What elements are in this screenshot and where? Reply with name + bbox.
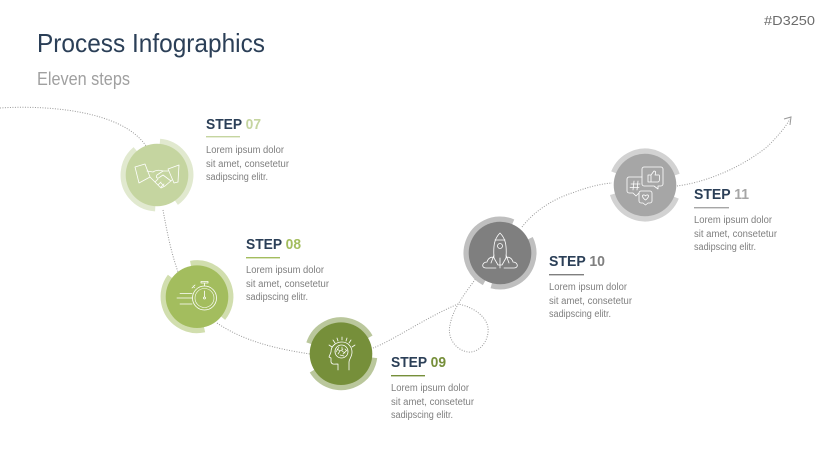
subtitle: Eleven steps [37,69,130,89]
step 08 text: STEP 08 [246,236,301,253]
step 11 badge [601,141,689,229]
step 07 text: STEP 07 [206,116,261,133]
step 10 text: Lorem ipsum dolor [549,282,628,293]
colour code label: #D3250 [764,13,815,28]
arrow head [784,117,791,125]
step 11 text [694,186,778,253]
step 10 text: sadipscing elitr. [549,309,611,320]
icon: rocket [483,233,517,268]
step 09 text: sit amet, consetetur [391,397,475,408]
step 09 text: Lorem ipsum dolor [391,383,470,394]
step 07 badge [120,138,194,212]
step 11 text: sadipscing elitr. [694,242,756,253]
step 08 badge [157,257,237,336]
step 10 text: sit amet, consetetur [549,296,633,307]
step 10 text: STEP 10 [549,253,605,270]
icon: stopwatch [177,282,216,310]
step 11 text: Lorem ipsum dolor [694,215,773,226]
step 09 badge [299,311,383,396]
step 07 text [206,116,290,183]
step 08 text: sadipscing elitr. [246,292,308,303]
dotted journey path [0,107,790,354]
icon: handshake [135,164,179,188]
step 07 text: sit amet, consetetur [206,159,290,170]
step 08 text: sit amet, consetetur [246,279,330,290]
step 11 text: STEP 11 [694,186,749,203]
step 10 text [549,253,633,320]
step 09 text: sadipscing elitr. [391,410,453,421]
icon: social speech bubbles [627,167,663,205]
step 08 text [246,236,330,303]
step 09 text [391,354,475,421]
step 10 badge [455,208,545,298]
step 07 text: sadipscing elitr. [206,172,268,183]
step 08 text: Lorem ipsum dolor [246,265,325,276]
title: Process Infographics [37,28,265,58]
step 07 text: Lorem ipsum dolor [206,145,285,156]
step 11 text: sit amet, consetetur [694,229,778,240]
step 09 text: STEP 09 [391,354,446,371]
icon: head with brain [329,337,355,370]
